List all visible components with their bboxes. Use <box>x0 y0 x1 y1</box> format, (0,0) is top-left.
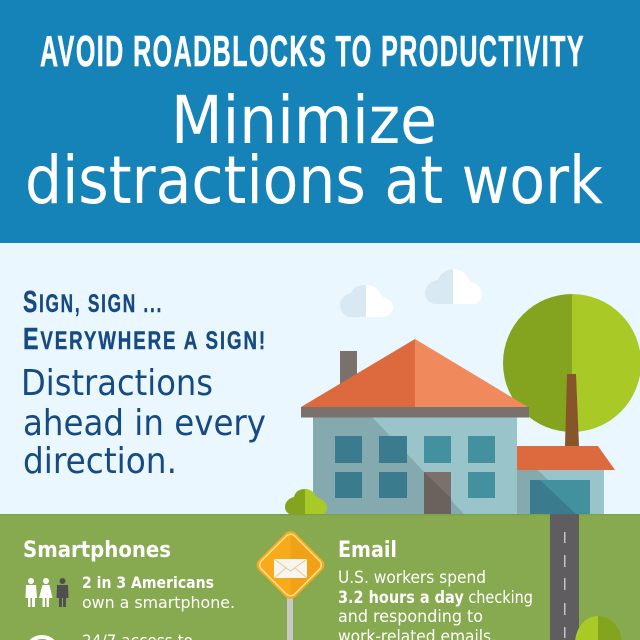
icon: access <box>26 637 58 640</box>
text: distractions ahead: Distractions <box>21 363 213 404</box>
panel: green ground <box>0 514 640 640</box>
section: email <box>338 538 533 640</box>
icon: house <box>301 339 615 515</box>
icon: roadside tree <box>575 616 622 640</box>
subheading: everywhere a sign: EVERYWHERE A SIGN! <box>23 321 267 356</box>
subheading: sign, sign: SIGN, SIGN ... <box>23 284 163 319</box>
text: email stat: 3.2 hours a day checking <box>338 588 533 607</box>
stat: 2 in 3 Americans <box>82 573 235 612</box>
heading: email: Email <box>338 538 397 563</box>
text: distractions ahead <box>21 363 266 482</box>
icon: bush <box>285 489 327 515</box>
stat: 2 in 3 Americans: 2 in 3 Americans <box>82 573 214 592</box>
road <box>550 514 579 640</box>
text: distractions ahead: ahead in every <box>23 403 266 444</box>
panel: header <box>0 0 640 243</box>
text: email stat: U.S. workers spend <box>338 568 486 587</box>
icon: email road sign <box>254 528 327 640</box>
icon: people <box>26 578 68 607</box>
text: email stat: and responding to <box>338 607 483 626</box>
icon: cloud right <box>425 269 482 304</box>
icon: tree <box>503 294 640 446</box>
section: smartphones <box>23 538 235 640</box>
text: email stat <box>338 568 533 640</box>
text: distractions ahead: direction. <box>23 441 177 482</box>
heading: smartphones: Smartphones <box>23 538 171 563</box>
heading: minimize: Minimize <box>171 82 437 159</box>
panel: intro text <box>21 284 267 482</box>
icon: cloud left <box>340 285 393 317</box>
stat: 2 in 3 Americans: own a smartphone. <box>82 593 235 612</box>
